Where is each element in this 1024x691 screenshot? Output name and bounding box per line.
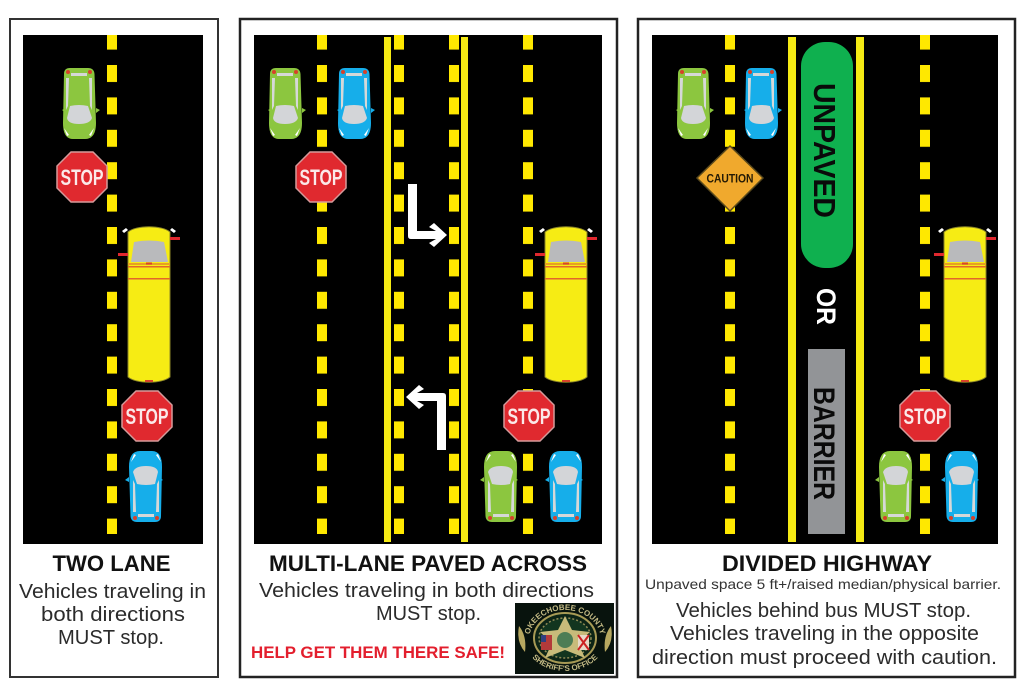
median: barrier xyxy=(807,349,845,534)
logo: sheriff's office seal xyxy=(515,603,614,674)
slogan: HELP GET THEM THERE SAFE! xyxy=(251,643,505,662)
text: divided highway rule: Vehicles behind bus MUST stop. xyxy=(676,600,971,622)
panel: divided highway xyxy=(638,19,1015,677)
icon: stop sign xyxy=(57,152,107,202)
icon: stop sign: STOP xyxy=(904,404,946,429)
icon: green car xyxy=(875,451,913,522)
road: multi-lane xyxy=(254,35,602,544)
text: two lane rule: MUST stop. xyxy=(58,627,164,649)
logo: sheriff's office seal: OKEECHOBEE COUNTY xyxy=(524,604,606,634)
icon: stop sign xyxy=(900,391,950,441)
arrow: turn from opposite lane xyxy=(406,385,446,450)
text: two lane rule xyxy=(19,581,206,649)
heading: divided highway: DIVIDED HIGHWAY xyxy=(722,551,932,576)
text: two lane rule: Vehicles traveling in xyxy=(19,581,206,603)
road: divided highway xyxy=(652,35,998,544)
icon: stop sign xyxy=(504,391,554,441)
icon: blue car xyxy=(125,451,163,522)
text: divided highway rule xyxy=(652,600,997,669)
text: two lane rule: both directions xyxy=(41,604,185,626)
heading: multi-lane: MULTI-LANE PAVED ACROSS xyxy=(269,551,587,576)
text: multi-lane rule: MUST stop. xyxy=(376,603,481,625)
heading: two lane: TWO LANE xyxy=(52,551,170,576)
panel: multi-lane paved across xyxy=(238,18,618,678)
icon: green car xyxy=(268,68,306,139)
label: or: OR xyxy=(811,288,841,325)
icon: school bus xyxy=(934,227,996,382)
logo: sheriff's office seal: SHERIFF'S OFFICE xyxy=(532,654,598,671)
icon: green car xyxy=(480,451,518,522)
text: multi-lane rule: Vehicles traveling in both directions xyxy=(259,580,594,602)
icon: stop sign: STOP xyxy=(300,165,342,190)
icon: stop sign xyxy=(122,391,172,441)
panel: two lane xyxy=(10,19,218,677)
icon: stop sign: STOP xyxy=(508,404,550,429)
icon: stop sign: STOP xyxy=(126,404,168,429)
icon: blue car xyxy=(744,68,782,139)
median: unpaved: UNPAVED xyxy=(807,83,842,218)
median: barrier: BARRIER xyxy=(807,387,840,500)
icon: stop sign xyxy=(296,152,346,202)
icon: blue car xyxy=(337,68,375,139)
icon: caution sign xyxy=(697,146,763,211)
text: multi-lane rule xyxy=(259,580,594,625)
icon: school bus xyxy=(535,227,597,382)
text: median definition: Unpaved space 5 ft+/raised median/physical barrier. xyxy=(645,576,1001,592)
icon: school bus xyxy=(118,227,180,382)
icon: green car xyxy=(62,68,100,139)
arrow: turn left across lanes xyxy=(408,184,447,247)
icon: blue car xyxy=(941,451,979,522)
text: divided highway rule: Vehicles traveling in the opposite xyxy=(670,623,979,645)
icon: caution sign: CAUTION xyxy=(706,172,754,186)
icon: green car xyxy=(676,68,714,139)
median: unpaved xyxy=(801,42,853,268)
road: two lane xyxy=(23,35,203,544)
icon: stop sign: STOP xyxy=(60,165,104,190)
text: divided highway rule: direction must proceed with caution. xyxy=(652,647,997,669)
icon: blue car xyxy=(545,451,583,522)
